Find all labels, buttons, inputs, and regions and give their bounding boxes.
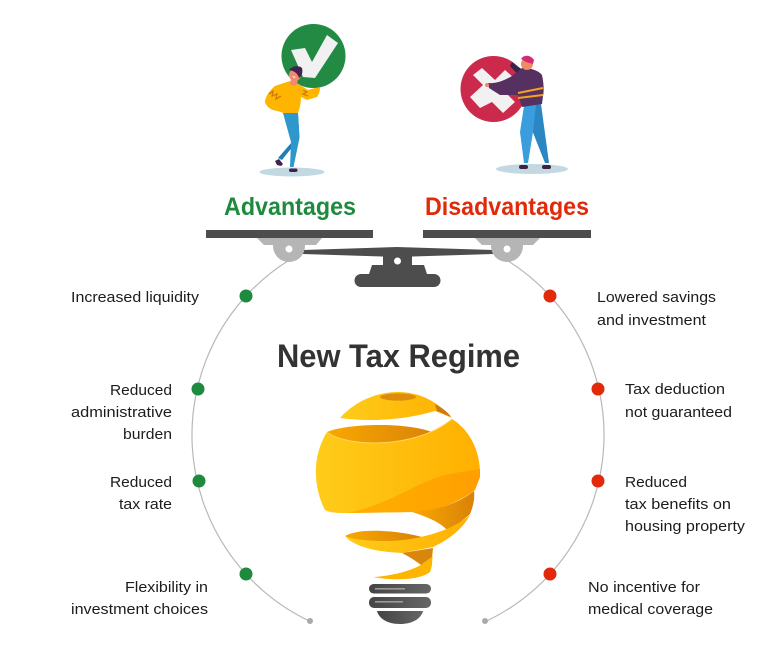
arc end point: left [307, 618, 313, 624]
advantage: reduced tax rate [110, 474, 206, 513]
advantage: reduced tax rate: tax rate [119, 496, 172, 513]
disadvantage: tax deduction not guaranteed: not guaranteed [625, 404, 732, 421]
icon: man holding green check [260, 24, 346, 176]
disadvantage: tax deduction not guaranteed: Tax deduction [625, 381, 725, 398]
icon: light bulb [316, 392, 480, 624]
advantage: increased liquidity: Increased liquidity [71, 289, 200, 306]
disadvantage: reduced tax benefits on housing property: tax benefits on [625, 496, 731, 513]
advantage: flexibility in investment choices: investment choices [71, 601, 208, 618]
heading: advantages: Advantages [224, 193, 356, 221]
arc end point: right [482, 618, 488, 624]
title: New Tax Regime [277, 338, 520, 374]
heading: disadvantages: Disadvantages [425, 193, 589, 221]
advantage: reduced administrative burden: Reduced [110, 382, 172, 399]
advantage: reduced tax rate: Reduced [110, 474, 172, 491]
disadvantage: lowered savings and investment: and investment [597, 312, 707, 329]
advantage: reduced administrative burden: administrative [71, 404, 172, 421]
disadvantage: lowered savings and investment: Lowered savings [597, 289, 716, 306]
advantage: flexibility in investment choices: Flexibility in [125, 579, 208, 596]
advantage: reduced administrative burden [71, 382, 204, 443]
disadvantage: tax deduction not guaranteed [592, 381, 732, 421]
disadvantage: reduced tax benefits on housing property: housing property [625, 518, 746, 535]
disadvantage: no incentive for medical coverage [544, 568, 713, 618]
disadvantage: lowered savings and investment [544, 289, 716, 329]
arc: disadvantages [486, 260, 604, 621]
advantage: reduced administrative burden: burden [123, 426, 172, 443]
arc: advantages [192, 260, 310, 621]
advantage: increased liquidity [71, 289, 252, 306]
disadvantage: no incentive for medical coverage: medical coverage [588, 601, 713, 618]
advantage: flexibility in investment choices [71, 568, 252, 618]
disadvantage: reduced tax benefits on housing property: Reduced [625, 474, 687, 491]
disadvantage: no incentive for medical coverage: No incentive for [588, 579, 700, 596]
icon: man holding red cross [460, 56, 568, 174]
balance scale [206, 230, 591, 287]
disadvantage: reduced tax benefits on housing property [592, 474, 746, 535]
